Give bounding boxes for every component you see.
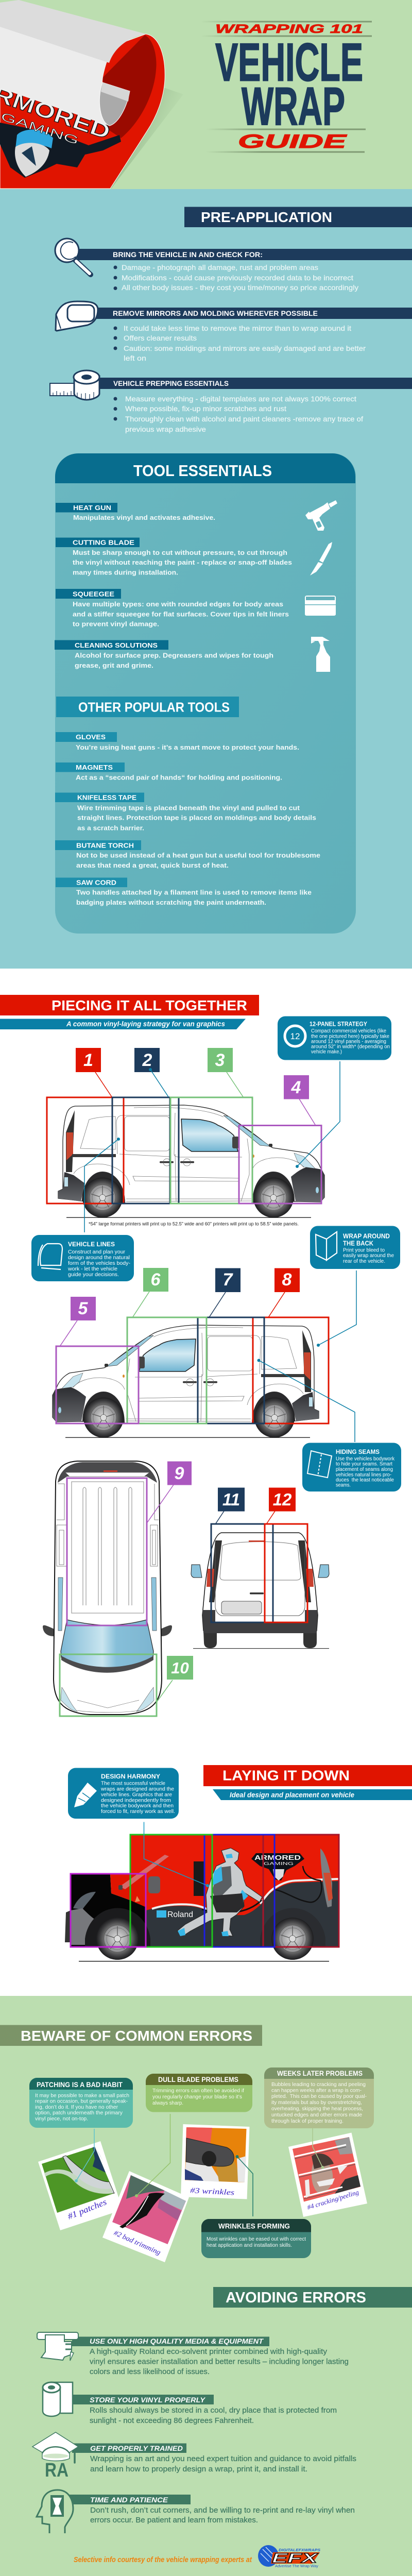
check list: bring the vehicle in: All other body issues - they cost you time/money so price accordingly (122, 283, 358, 292)
callout: 12-panel strategy (278, 1016, 391, 1168)
credit: selective info: Selective info courtesy of the vehicle wrapping experts at (74, 2556, 252, 2564)
callout: weeks later problems: Bubbles leading to cracking and peeling (271, 2081, 366, 2088)
callout: vehicle lines: guide your decisions. (68, 1272, 119, 1278)
callout: design harmony (68, 1768, 179, 1819)
panel number: 11: 11 (222, 1490, 240, 1509)
tip: store vinyl properly (43, 2382, 337, 2425)
background: pre-application teal (0, 189, 412, 969)
check list: bring the vehicle in: BRING THE VEHICLE IN AND CHECK FOR: (113, 250, 263, 259)
panel: tool essentials: KNIFELESS TAPE (77, 793, 136, 802)
callout: hiding seams: vehicles natural lines pro- (336, 1472, 391, 1478)
panel: tool essentials: You’re using heat guns - it’s a smart move to protect your hands. (76, 744, 299, 751)
panel: tool essentials: GLOVES (76, 733, 106, 741)
callout: wrinkles forming: Most wrinkles can be eased out with correct (207, 2236, 306, 2242)
callout: vehicle lines (31, 1235, 134, 1281)
panel: tool essentials: as a scratch barrier. (77, 824, 144, 832)
panel: tool essentials: the vinyl without reaching the paint - replace or snap-off blades (73, 559, 292, 566)
panel: tool essentials: badging plates without scratching the paint underneath. (76, 899, 266, 906)
callout: hiding seams: Use the vehicles bodywork (336, 1456, 395, 1462)
panel number: 4: 4 (291, 1078, 301, 1097)
polaroid: #4 cracking/peeling (288, 2133, 367, 2217)
callout: weeks later problems: can happen weeks after a wrap is com- (271, 2088, 362, 2094)
title lockup (201, 21, 372, 152)
callout: weeks later problems: WEEKS LATER PROBLEMS (277, 2070, 363, 2077)
panel: tool essentials (55, 453, 356, 934)
vinyl roll illustration (0, 0, 183, 189)
panel: tool essentials: Act as a “second pair of hands“ for holding and positioning. (76, 774, 282, 781)
polaroid: #2 bad trimming (102, 2171, 189, 2262)
callout: hiding seams: seams. (336, 1483, 351, 1488)
heading: pre-application (184, 207, 412, 227)
icon: graduation cap with RA (32, 2432, 78, 2481)
tip: store vinyl properly: sunlight - not exceeding 86 degrees Fahrenheit. (90, 2416, 254, 2425)
check list: vehicle prepping: previous wrap adhesive (125, 425, 206, 433)
panel number: 3 (208, 1048, 243, 1097)
panel: tool essentials: SQUEEGEE (73, 590, 114, 598)
callout: 12-panel strategy: around 52” in width* (depending on (311, 1044, 390, 1050)
background: white diagram area (0, 969, 412, 1996)
subheading banner: ideal design: Ideal design and placement on vehicle (230, 1791, 354, 1799)
panel number: 2: 2 (142, 1050, 152, 1070)
panel number: 6: 6 (151, 1270, 161, 1290)
callout: hiding seams: to hide your seams. Smart (336, 1461, 392, 1467)
callout: wrap around the back (310, 1226, 400, 1347)
panel number: 4 (284, 1075, 315, 1125)
panel: tool essentials: Not to be used instead of a heat gun but a useful tool for troublesome (76, 852, 320, 859)
callout: weeks later problems: pleted. This can be caused by poor qual- (271, 2093, 367, 2099)
heading: other popular tools: OTHER POPULAR TOOLS (78, 700, 230, 715)
panel number: 9 (147, 1461, 192, 1522)
check list: bring the vehicle in: Damage - photograph all damage, rust and problem areas (122, 263, 318, 272)
callout: 12-panel strategy: 12-PANEL STRATEGY (310, 1020, 367, 1027)
check list: remove mirrors: left on (124, 354, 146, 362)
check list: vehicle prepping: Where possible, fix-up minor scratches and rust (125, 404, 286, 413)
icon: wing mirror (56, 301, 98, 331)
tip: store vinyl properly: STORE YOUR VINYL PROPERLY (90, 2396, 206, 2404)
logo: digital efx wraps: DIGITALEFXWRAPS (279, 2548, 320, 2552)
callout: dull blade problems (135, 2074, 252, 2197)
panel outlines: van one (47, 1097, 321, 1204)
callout: design harmony: designed independently from (101, 1797, 171, 1803)
callout: patching is a bad habit: vinyl piece, not on-top. (35, 2115, 88, 2122)
heading: piecing it all together (0, 995, 259, 1015)
callout: patching is a bad habit (29, 2078, 133, 2182)
artwork: roland logo (157, 1910, 193, 1919)
callout: hiding seams (258, 1359, 401, 1492)
panel: tool essentials: many times during installation. (73, 569, 178, 576)
polaroid: #4 cracking/peeling: #4 cracking/peeling (306, 2188, 360, 2211)
panel: tool essentials: MAGNETS (76, 764, 113, 771)
callout: patching is a bad habit: ing, don’t do it. If you have no other (35, 2104, 118, 2110)
callout: hiding seams: placement of seams along (336, 1467, 393, 1472)
logo: digital efx wraps: Advertise The Wrap Way (275, 2565, 319, 2568)
callout: wrap around the back: WRAP AROUND (343, 1232, 390, 1240)
van top view (43, 1461, 172, 1715)
panel outlines: wrapped van (71, 1835, 339, 1947)
background: errors green (0, 1996, 412, 2576)
logo: digital efx wraps (258, 2545, 320, 2568)
panel outlines: top view (60, 1478, 157, 1716)
panel: tool essentials: Must be sharp enough to cut without pressure, to cut through (73, 549, 287, 556)
heading: laying it down: LAYING IT DOWN (222, 1767, 350, 1784)
icon: squeegee (305, 596, 336, 616)
icon: spray bottle (311, 637, 330, 672)
callout: vehicle lines: Construct and plan your (68, 1249, 125, 1255)
panel number: 5: 5 (78, 1299, 89, 1318)
callout: design harmony: forced to fit, rarely work as well. (101, 1808, 175, 1815)
icon: wide-format printer (37, 2332, 78, 2361)
panel outlines: van two (56, 1317, 329, 1423)
tip: time and patience (37, 2490, 355, 2533)
heading: beware of common errors: BEWARE OF COMMON ERRORS (21, 2028, 252, 2044)
subheading banner: vinyl-laying strategy (0, 1019, 246, 1029)
panel number: 9: 9 (175, 1464, 184, 1483)
callout: weeks later problems (264, 2067, 374, 2169)
heading: other popular tools (56, 697, 239, 717)
tip: high quality media: colors and less likelihood of issues. (90, 2367, 210, 2376)
check list: remove mirrors: REMOVE MIRRORS AND MOLDING WHEREVER POSSIBLE (113, 309, 318, 317)
tip: time and patience: errors occur. Be patient and learn from mistakes. (90, 2516, 258, 2524)
check list: remove mirrors (56, 301, 412, 362)
icon: cutting blade (310, 542, 332, 575)
title: guide: GUIDE (238, 131, 347, 152)
panel number: 6 (133, 1268, 168, 1317)
title: wrapping 101: WRAPPING 101 (215, 22, 363, 36)
van side view: right-facing (58, 1105, 324, 1218)
panel: tool essentials: straight lines. Protection tape is placed on moldings and body details (77, 814, 316, 821)
panel: tool essentials: Alcohol for surface prep. Degreasers and wipes for tough (75, 652, 273, 659)
heading: piecing it all together: PIECING IT ALL TOGETHER (52, 997, 247, 1013)
polaroid: #2 bad trimming: #2 bad trimming (112, 2229, 162, 2257)
callout: design harmony: vehicle lines. Graphics that are (101, 1792, 172, 1798)
polaroid: #1 patches: #1 patches (66, 2197, 108, 2222)
footnote: printer widths: *54” large format printers will print up to 52.5” wide and 60” printers will print up to 58.5” wide panels. (89, 1221, 299, 1227)
tip: high quality media: USE ONLY HIGH QUALITY MEDIA & EQUIPMENT (90, 2337, 264, 2345)
callout: dull blade problems: always sharp. (152, 2100, 183, 2106)
callout: vehicle lines: design around the natural (68, 1255, 130, 1261)
callout: 12-panel strategy: the one pictured here) typically take (311, 1033, 389, 1040)
callout: vehicle lines: VEHICLE LINES (68, 1241, 115, 1248)
icon: head with hourglass (37, 2490, 73, 2533)
tip: store vinyl properly: Rolls should always be stored in a cool, dry place that is protected from (90, 2406, 337, 2415)
panel: tool essentials: Wire trimming tape is placed beneath the vinyl and pulled to cut (77, 805, 300, 812)
van rear view (191, 1533, 329, 1649)
heading: avoiding errors: AVOIDING ERRORS (226, 2290, 366, 2306)
panel number: 7: 7 (223, 1270, 234, 1290)
check list: vehicle prepping: Thoroughly clean with alcohol and paint cleaners -remove any trace of (125, 415, 363, 423)
callout: patching is a bad habit: It may be possible to make a small patch (35, 2093, 129, 2099)
background: header green (0, 0, 412, 189)
panel number: 12: 12 (273, 1490, 292, 1509)
polaroid: #3 wrinkles (181, 2124, 249, 2199)
tip: high quality media (37, 2332, 349, 2376)
icon: graduation cap with RA: RA (45, 2460, 68, 2481)
callout: hiding seams: HIDING SEAMS (336, 1448, 380, 1455)
panel number: 2 (134, 1048, 168, 1097)
callout: wrap around the back: easily wrap around the (343, 1252, 394, 1259)
title: wrap: WRAP (242, 77, 345, 137)
check list: vehicle prepping: VEHICLE PREPPING ESSENTIALS (113, 379, 229, 387)
callout: patching is a bad habit: repair on occasion, but generally speak- (35, 2098, 128, 2104)
panel number: 1: 1 (83, 1050, 93, 1070)
callout: design harmony: the vehicle bodywork and then (101, 1803, 174, 1809)
panel: tool essentials: Two handles attached by a filament line is used to remove items like (76, 889, 312, 896)
callout: 12-panel strategy: vehicle make.) (311, 1049, 342, 1055)
icon: heat gun (305, 500, 337, 531)
artwork: robot figure (177, 1848, 262, 1936)
callout: vehicle lines: form of the vehicles body- (68, 1260, 130, 1266)
panel header (55, 453, 355, 483)
leader: design harmony (144, 1822, 208, 1886)
panel: tool essentials: CLEANING SOLUTIONS (75, 641, 158, 649)
callout: wrinkles forming: WRINKLES FORMING (218, 2222, 290, 2230)
panel number: 7 (209, 1268, 241, 1317)
icon: magnifying glass (55, 239, 91, 275)
tip: time and patience: TIME AND PATIENCE (90, 2496, 168, 2504)
callout: weeks later problems: through lack of proper training. (271, 2118, 344, 2124)
artwork: roland logo: Roland (167, 1910, 193, 1919)
callout: 12-panel strategy: around 12 vinyl panels - averaging (311, 1039, 386, 1045)
panel number: 11 (216, 1488, 245, 1523)
callout: design harmony: DESIGN HARMONY (101, 1773, 160, 1780)
callout: dull blade problems: DULL BLADE PROBLEMS (158, 2076, 238, 2083)
leader: vehicle lines (84, 1139, 118, 1232)
callout: vehicle lines: work - let the vehicle (67, 1266, 117, 1272)
heading: pre-application: PRE-APPLICATION (201, 209, 332, 225)
panel number: 8: 8 (282, 1270, 292, 1290)
panel: tool essentials: grease, grit and grime. (75, 662, 153, 669)
heading: laying it down (203, 1765, 412, 1786)
check list: bring the vehicle in: Modifications - could cause previously recorded data to be incorrect (122, 274, 353, 282)
check list: bring the vehicle in (55, 239, 412, 292)
callout: weeks later problems: untucked edges and other errors made (271, 2112, 362, 2118)
armored gaming logo art (0, 82, 121, 178)
subheading banner: vinyl-laying strategy: A common vinyl-laying strategy for van graphics (66, 1020, 225, 1028)
panel: tool essentials: CUTTING BLADE (73, 539, 134, 546)
artwork: armored gaming logo (251, 1853, 304, 1880)
icon: measuring tape (50, 370, 99, 400)
heading: beware of common errors (0, 2025, 262, 2046)
tip: get properly trained: and learn how to properly design a wrap, print it, and install it. (90, 2465, 307, 2473)
callout: 12-panel strategy: 12 (290, 1031, 300, 1041)
panel outlines: rear view (211, 1524, 307, 1622)
callout: wrap around the back: THE BACK (343, 1240, 374, 1247)
polaroid: #3 wrinkles: #3 wrinkles (190, 2187, 235, 2197)
tip: high quality media: vinyl ensures easier installation and better results – including longer lasting (90, 2358, 349, 2366)
panel: tool essentials: and a stiffer squeegee for flat surfaces. Cover tips in felt liners (73, 611, 289, 618)
icon: vinyl roll (43, 2382, 73, 2416)
polaroid: #1 patches (38, 2141, 123, 2230)
leader dot: design harmony (206, 1884, 209, 1887)
panel: tool essentials: TOOL ESSENTIALS (133, 462, 272, 480)
panel number: 10 (157, 1656, 193, 1702)
callout: weeks later problems: ity materials but also by overstretching, (271, 2099, 362, 2106)
callout: dull blade problems: you regularly change your blade so it’s (152, 2094, 242, 2100)
van side view: left-facing (53, 1325, 319, 1438)
panel: tool essentials: to prevent vinyl damage. (73, 620, 159, 628)
leader dot: vehicle lines (117, 1138, 120, 1141)
panel: tool essentials: areas that need a great, quick burst of heat. (76, 862, 229, 869)
heading: avoiding errors (213, 2287, 412, 2308)
wrapped van artwork (65, 1835, 339, 1962)
panel number: 10: 10 (171, 1659, 189, 1677)
armored gaming logo art: GAMING (0, 110, 80, 147)
callout: wrinkles forming: heat application and installation skills. (207, 2242, 292, 2248)
callout: hiding seams: duces the least noticeable (336, 1478, 394, 1483)
check list: vehicle prepping (50, 370, 412, 433)
panel: tool essentials: HEAT GUN (73, 504, 111, 512)
panel number: 1 (76, 1048, 112, 1097)
callout: patching is a bad habit: PATCHING IS A BAD HABIT (37, 2080, 123, 2089)
panel number: 3: 3 (215, 1050, 225, 1070)
tip: get properly trained: Wrapping is an art and you need expert tuition and guidance to avoid pitfalls (90, 2454, 356, 2463)
callout: weeks later problems: overheating, skipping the heat process, (271, 2106, 363, 2112)
panel number: 8 (268, 1268, 300, 1317)
callout: wrinkles forming (201, 2155, 311, 2258)
logo: digital efx wraps: EFX (272, 2550, 319, 2566)
panel: tool essentials: Manipulates vinyl and activates adhesive. (73, 514, 215, 521)
panel number: 12 (267, 1488, 296, 1523)
panel: tool essentials: SAW CORD (76, 879, 116, 886)
artwork: armored gaming logo: GAMING (264, 1861, 294, 1866)
callout: 12-panel strategy: Compact commercial vehicles (like (311, 1028, 386, 1034)
check list: remove mirrors: Offers cleaner results (124, 334, 197, 342)
artwork: armored gaming logo: ARMORED (254, 1854, 301, 1861)
check list: remove mirrors: It could take less time to remove the mirror than to wrap around it (124, 324, 351, 332)
callout: dull blade problems: Trimming errors can often be avoided if (152, 2088, 244, 2094)
check list: vehicle prepping: Measure everything - digital templates are not always 100% correct (125, 395, 356, 403)
panel: tool essentials: BUTANE TORCH (76, 842, 134, 849)
check list: remove mirrors: Caution: some moldings and mirrors are easily damaged and are better (124, 344, 366, 352)
tip: high quality media: A high-quality Roland eco-solvent printer combined with high-quality (90, 2347, 328, 2356)
tip: get properly trained (32, 2432, 356, 2481)
callout: design harmony: wraps are designed around the (100, 1786, 174, 1792)
callout: wrap around the back: Print your bleed to (343, 1247, 385, 1253)
callout: design harmony: The most successful vehicle (101, 1781, 165, 1787)
callout: patching is a bad habit: option, patch underneath the primary (35, 2110, 123, 2116)
subheading banner: ideal design (213, 1789, 412, 1800)
tip: get properly trained: GET PROPERLY TRAINED (90, 2444, 183, 2452)
tip: time and patience: Don’t rush, don’t cut corners, and be willing to re-print and re-lay vinyl when (90, 2506, 355, 2515)
callout: wrap around the back: rear of the vehicle. (343, 1258, 385, 1264)
panel number: 5 (60, 1297, 96, 1346)
panel: tool essentials: Have multiple types: one with rounded edges for body areas (73, 601, 283, 608)
